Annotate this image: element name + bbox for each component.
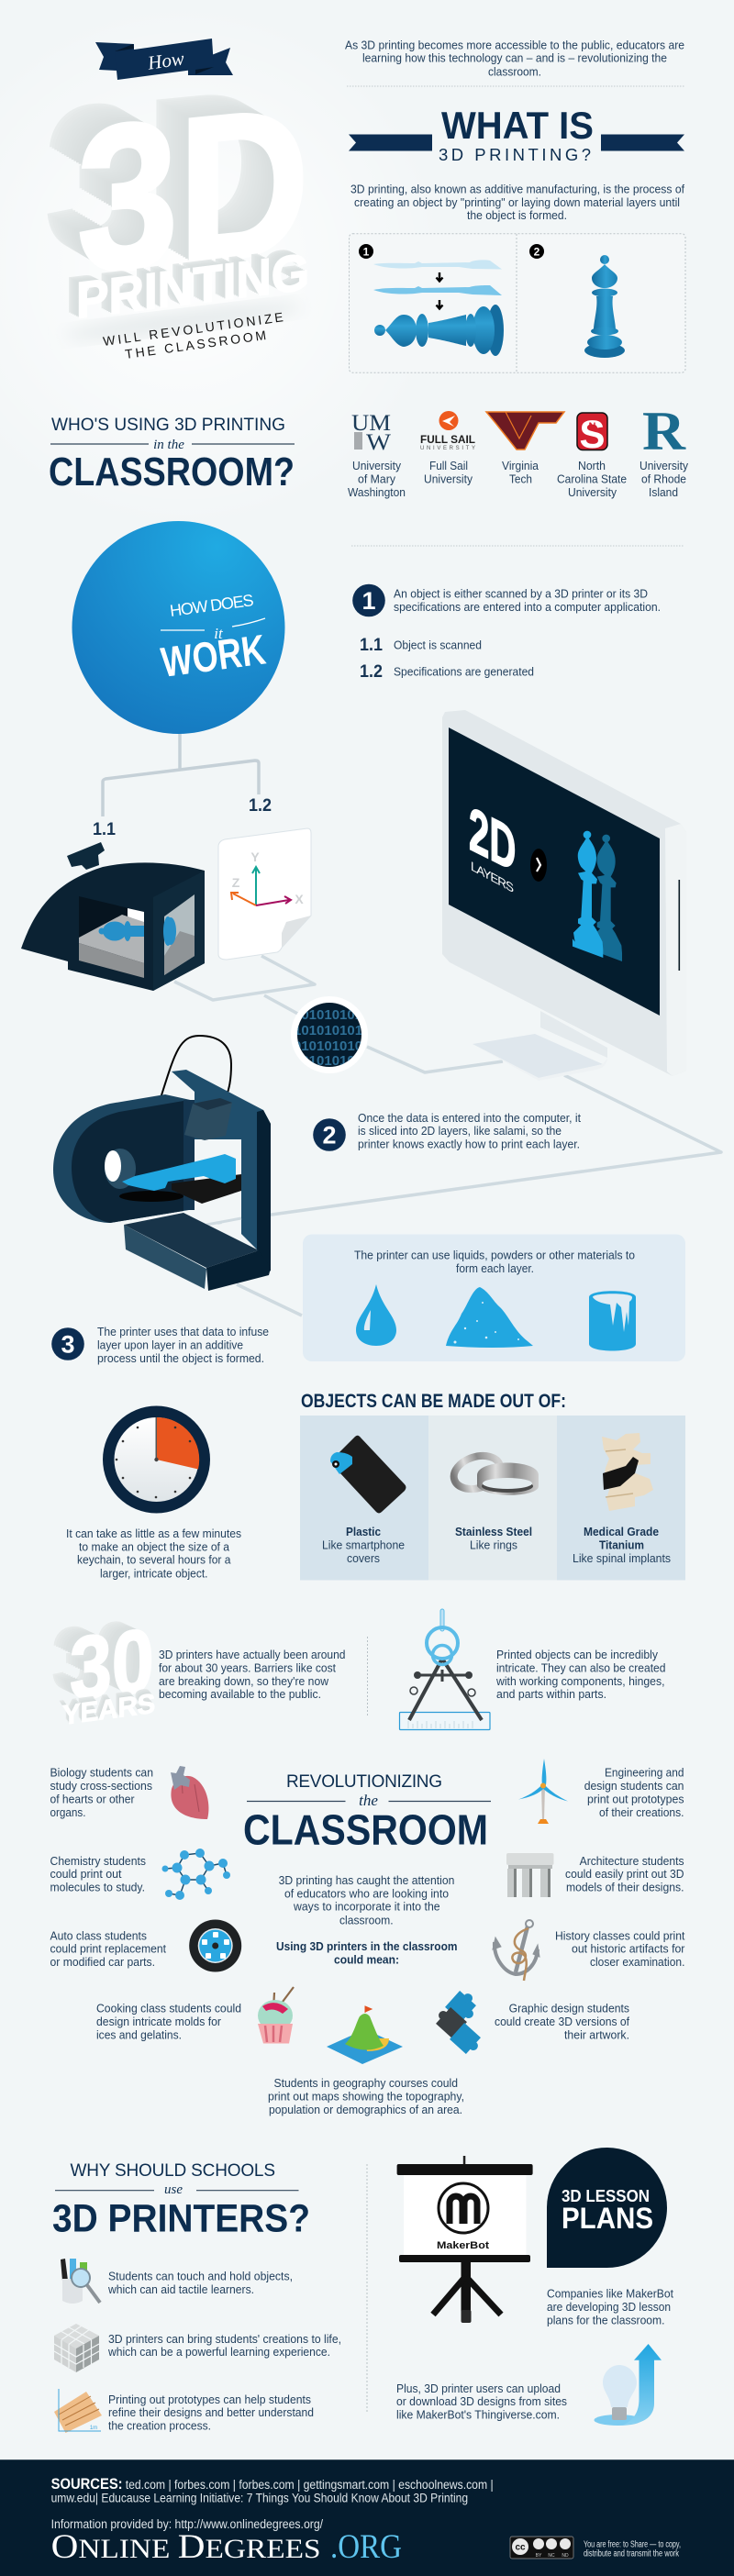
university labels: University	[424, 473, 473, 486]
icon: cube	[54, 2324, 99, 2372]
heading: who's using	[49, 416, 295, 494]
chess piece vertical	[584, 255, 625, 358]
icon: cup and magnifier	[61, 2259, 100, 2304]
step 2 text	[358, 1112, 581, 1150]
callout: graphic design: Graphic design students	[509, 2002, 629, 2015]
step 2 text: Once the data is entered into the computer, it	[358, 1112, 581, 1125]
heading: revolutionizing the classroom: CLASSROOM	[243, 1805, 488, 1853]
reason 2 text	[107, 2333, 341, 2359]
icon: scanner	[21, 842, 205, 991]
panel: titanium: Titanium	[599, 1539, 644, 1552]
icon: anchor	[493, 1920, 539, 1981]
badge 1: 1	[361, 587, 376, 615]
callout: engineering	[584, 1767, 684, 1819]
creative commons badge: BY	[536, 2553, 542, 2559]
panel: titanium: Like spinal implants	[573, 1552, 671, 1565]
center text: Using 3D printers in the classroom	[276, 1940, 457, 1953]
sources: ted.com | forbes.com | forbes.com | gettingsmart.com | eschoolnews.com |	[126, 2478, 494, 2492]
logo: Full Sail	[420, 411, 475, 451]
badge: 3D lesson plans	[547, 2148, 667, 2268]
chess piece horizontal	[374, 305, 504, 356]
callout: geography: population or demographics of an area.	[269, 2104, 462, 2116]
callout: geography: Students in geography courses could	[273, 2077, 458, 2090]
callout: auto class: or modified car parts.	[50, 1956, 155, 1969]
icon: tire	[189, 1919, 241, 1972]
binary circle: 1010101010	[294, 1053, 370, 1069]
panel: plastic: covers	[347, 1552, 380, 1565]
substep 1.1: Object is scanned	[394, 638, 482, 651]
sources: Information provided by: http://www.onlinedegrees.org/	[51, 2517, 323, 2531]
logo: Virginia Tech	[486, 412, 564, 450]
substep 1.2: 1.2	[360, 662, 383, 682]
binary circle: 1010101010	[294, 1023, 370, 1038]
reason 1 text: Students can touch and hold objects,	[108, 2270, 293, 2282]
callout: architecture	[565, 1855, 684, 1893]
heading: why should schools use 3D printers	[52, 2161, 310, 2241]
fact: intricate objects text: with working components, hinges,	[495, 1675, 664, 1688]
center text: ways to incorporate it into the	[293, 1901, 440, 1914]
fact: intricate objects text: Printed objects can be incredibly	[496, 1649, 659, 1661]
callout: history: out historic artifacts for	[572, 1943, 684, 1956]
callout: geography	[268, 2077, 464, 2116]
icon: 3D printer	[53, 1036, 271, 1291]
ribbon: How: How	[146, 47, 185, 74]
2D layers label: 2D	[469, 794, 516, 886]
clock caption: to make an object the size of a	[79, 1541, 229, 1554]
printer disc	[53, 1094, 195, 1223]
word years: YEARS	[62, 1689, 155, 1731]
icon: monitor	[442, 710, 686, 1081]
callout: chemistry: molecules to study.	[50, 1881, 145, 1893]
callout: chemistry: could print out	[50, 1868, 122, 1881]
logo: NC State: S	[580, 413, 606, 457]
callout: graphic design: could create 3D versions of	[495, 2015, 629, 2028]
callout: chemistry: Chemistry students	[50, 1855, 146, 1868]
license text	[584, 2540, 681, 2559]
center text: classroom.	[339, 1914, 394, 1926]
thingiverse text: like MakerBot's Thingiverse.com.	[396, 2409, 560, 2422]
university labels: Island	[649, 486, 678, 499]
intro text: learning how this technology can – and is – revolutionizing the	[362, 51, 667, 64]
brand logo: ONLINE DEGREES	[51, 2528, 321, 2566]
callout: architecture: Architecture students	[580, 1855, 684, 1868]
icon: spec sheet with axes: Y	[250, 849, 260, 864]
printer base	[124, 1225, 206, 1289]
callout: auto class: Auto class students	[50, 1930, 147, 1943]
callout: architecture: could easily print out 3D	[565, 1868, 684, 1881]
number 30: 30	[70, 1609, 154, 1719]
heading: why should schools use 3D printers: WHY SHOULD SCHOOLS	[70, 2161, 275, 2181]
sources: SOURCES:	[51, 2475, 123, 2493]
title word: 3D: 3D	[77, 63, 309, 316]
center text: could mean:	[334, 1954, 399, 1967]
icon: drop	[356, 1284, 396, 1346]
substep 1.2: Specifications are generated	[394, 666, 534, 679]
icon: rings	[450, 1450, 539, 1495]
icon: spec sheet with axes: Z	[232, 875, 240, 890]
creative commons badge: NC	[548, 2553, 555, 2559]
logo: NC State: N	[589, 421, 596, 432]
university labels: of Rhode	[641, 473, 686, 486]
makerbot logo	[437, 2183, 489, 2251]
logo: University of Mary Washington: UM	[351, 411, 391, 436]
panel: layering steps	[349, 234, 685, 372]
title subtitle: WILL REVOLUTIONIZE	[102, 309, 284, 349]
icon: topographic map	[327, 2006, 403, 2064]
step 3 text: layer upon layer in an additive	[97, 1339, 243, 1352]
panel: titanium: Medical Grade	[584, 1526, 659, 1538]
logo: Full Sail: FULL SAIL	[420, 435, 475, 446]
heading: revolutionizing the classroom: REVOLUTIONIZING	[286, 1772, 442, 1792]
heading: what is 3D printing	[349, 104, 684, 164]
panel: plastic: Plastic	[346, 1526, 381, 1538]
bishop front layer	[573, 831, 603, 958]
reason 1 text	[107, 2270, 293, 2296]
fact: 30 years text: becoming available to the public.	[159, 1688, 321, 1701]
callout: biology: Biology students can	[50, 1767, 153, 1780]
title word: Printing: PRINTING	[76, 242, 309, 329]
lesson plan text: plans for the classroom.	[547, 2314, 664, 2326]
step 3	[51, 1326, 269, 1365]
heading: why should schools use 3D printers: 3D PRINTERS?	[52, 2197, 310, 2241]
arrow down 2	[437, 300, 442, 308]
intro text	[345, 39, 684, 79]
printer tower	[172, 1070, 271, 1277]
circle: how does it work	[72, 521, 284, 734]
step 1 text	[394, 587, 661, 614]
center text	[276, 1874, 457, 1967]
reason 2 text: 3D printers can bring students' creations to life,	[108, 2333, 341, 2346]
fact: 30 years text: for about 30 years. Barriers like cost	[159, 1662, 336, 1675]
icon: phone case	[330, 1436, 406, 1514]
step 3 text	[97, 1326, 269, 1365]
reason 2 text: which can be a powerful learning experience.	[107, 2346, 330, 2359]
panel: plastic: Like smartphone	[322, 1539, 405, 1552]
step 1	[352, 584, 661, 682]
panel: materials	[303, 1235, 685, 1361]
heading: objects can be made out of: OBJECTS CAN BE MADE OUT OF:	[301, 1391, 566, 1412]
icon: projector screen	[397, 2156, 533, 2323]
badge 2	[313, 1118, 346, 1151]
callout: graphic design: their artwork.	[564, 2029, 629, 2042]
logos: universities	[351, 401, 686, 461]
callout: engineering: print out prototypes	[587, 1793, 684, 1805]
reason 3 text: the creation process.	[108, 2420, 211, 2433]
definition text	[350, 183, 684, 222]
printed object	[122, 1154, 236, 1191]
reason 1 text: which can aid tactile learners.	[107, 2283, 254, 2296]
fact: intricate objects text: intricate. They can also be created	[496, 1662, 666, 1675]
icon: columns	[506, 1853, 554, 1897]
step 3 text: The printer uses that data to infuse	[97, 1326, 269, 1338]
heading: revolutionizing the classroom	[243, 1772, 491, 1853]
monitor stand	[473, 1011, 607, 1081]
icon: compass and ruler	[400, 1609, 490, 1730]
footer	[0, 2459, 734, 2576]
icon: cupcake	[258, 1987, 294, 2044]
step 2	[313, 1112, 581, 1151]
center text: of educators who are looking into	[284, 1888, 449, 1901]
thingiverse text: Plus, 3D printer users can upload	[396, 2382, 561, 2395]
license text: You are free: to Share — to copy,	[584, 2540, 681, 2550]
clock caption: It can take as little as a few minutes	[66, 1527, 241, 1540]
step badge 2	[529, 244, 544, 259]
step 1 text: specifications are entered into a computer application.	[394, 601, 661, 614]
icon: spec sheet with axes: X	[295, 892, 304, 906]
callout: history: closer examination.	[590, 1956, 684, 1969]
definition text: 3D printing, also known as additive manufacturing, is the process of	[350, 183, 684, 196]
callout: cooking	[96, 2002, 241, 2042]
callout: engineering: Engineering and	[605, 1767, 684, 1780]
university labels: Carolina State	[557, 473, 627, 486]
badge 1	[352, 584, 385, 616]
creative commons badge	[510, 2537, 573, 2559]
icon: wind turbine	[518, 1759, 568, 1824]
panel: stainless steel: Stainless Steel	[455, 1526, 532, 1538]
university labels: of Mary	[358, 473, 396, 486]
heading: who's using: in the	[153, 438, 184, 452]
badge 2: 2	[322, 1121, 337, 1149]
step 2 text: is sliced into 2D layers, like salami, so the	[358, 1125, 562, 1138]
callout: cooking: ices and gelatins.	[96, 2029, 182, 2042]
callout: auto class	[50, 1930, 166, 1969]
panel: titanium	[557, 1416, 685, 1580]
sources: umw.edu| Educause Learning Initiative: 7 Things You Should Know About 3D Printing	[51, 2492, 468, 2505]
icon: clock	[103, 1405, 210, 1514]
callout: engineering: design students can	[584, 1780, 684, 1793]
lesson plan text: Companies like MakerBot	[547, 2288, 673, 2301]
print bed	[119, 1191, 184, 1202]
icon: spec sheet with axes	[218, 828, 311, 960]
title: 3D Printing will revolutionize the classroom	[48, 63, 309, 361]
makerbot logo: MakerBot	[437, 2240, 489, 2251]
binary circle: 0101010100	[294, 1038, 370, 1054]
icon: wood plank: 1m	[90, 2426, 97, 2431]
university labels: University	[352, 460, 402, 472]
icon: powder pile	[446, 1287, 533, 1348]
callout: biology: study cross-sections	[50, 1780, 152, 1793]
badge 3	[51, 1327, 84, 1360]
university labels: North	[578, 460, 606, 472]
fact: 30 years text	[159, 1649, 345, 1701]
first layer	[373, 260, 502, 270]
label 1.2: 1.2	[249, 796, 272, 816]
binary circle: 1010101010	[294, 1007, 370, 1023]
university labels: Tech	[509, 473, 532, 486]
lesson plan text	[547, 2288, 673, 2326]
badge 3: 3	[61, 1330, 75, 1358]
university labels: Washington	[348, 486, 406, 499]
callout: biology: organs.	[50, 1806, 86, 1819]
label 1.1: 1.1	[93, 820, 116, 839]
intro text: As 3D printing becomes more accessible to the public, educators are	[345, 39, 684, 51]
bishop back layer	[592, 835, 622, 961]
bishop inside scanner	[99, 916, 176, 946]
filament wire	[161, 1036, 231, 1099]
callout: history: History classes could print	[555, 1930, 685, 1943]
substep 1.1	[360, 636, 482, 655]
reason 3 text: Printing out prototypes can help students	[108, 2393, 311, 2406]
panel: plastic	[300, 1416, 428, 1580]
icon: spine	[602, 1433, 653, 1511]
callout: biology	[50, 1767, 153, 1819]
step badge 2: 2	[534, 246, 540, 259]
step badge 1	[359, 244, 373, 259]
callout: architecture: models of their designs.	[566, 1881, 684, 1893]
circle: how does it work: it	[214, 625, 224, 642]
panel: stainless steel	[428, 1416, 557, 1580]
connector lines	[103, 732, 721, 1316]
icon: liquid bucket	[589, 1291, 636, 1350]
brand logo: .ORG	[330, 2528, 402, 2566]
step badge 1: 1	[363, 246, 370, 259]
icon: light bulb and arrow	[595, 2344, 662, 2426]
thingiverse text	[396, 2382, 567, 2422]
fact: 30 years text: are breaking down, so they're now	[159, 1675, 329, 1688]
clock caption: keychain, to several hours for a	[77, 1554, 231, 1567]
arrow down 1	[437, 272, 442, 281]
second layer	[373, 285, 502, 295]
substep 1.2	[360, 662, 534, 682]
callout: chemistry	[50, 1855, 146, 1893]
circle: how does it work: HOW DOES	[169, 591, 255, 620]
ribbon: How	[95, 39, 233, 80]
heading: why should schools use 3D printers: use	[164, 2182, 183, 2197]
fact: 30 years text: 3D printers have actually been around	[159, 1649, 345, 1661]
heading: revolutionizing the classroom: the	[359, 1792, 378, 1809]
title subtitle: THE CLASSROOM	[124, 328, 267, 361]
binary circle	[291, 996, 370, 1073]
creative commons badge: cc	[515, 2543, 526, 2552]
step 1 text: An object is either scanned by a 3D printer or its 3D	[394, 587, 648, 600]
logo: University of Mary Washington: W	[366, 430, 391, 455]
arrow chevron	[530, 849, 547, 882]
university labels: Virginia	[502, 460, 539, 472]
logo: Full Sail: UNIVERSITY	[420, 446, 475, 451]
callout: geography: print out maps showing the topography,	[268, 2090, 464, 2103]
university labels	[348, 460, 689, 499]
definition text: the object is formed.	[467, 209, 567, 222]
icon: molecule	[161, 1849, 230, 1900]
panel: stainless steel: Like rings	[470, 1539, 517, 1552]
logo: University of Mary Washington	[351, 411, 391, 455]
panel: materials: The printer can use liquids, powders or other materials to	[354, 1249, 635, 1262]
badge: 3D lesson plans: PLANS	[562, 2202, 653, 2235]
callout: graphic design	[495, 2002, 629, 2042]
2D layers label: LAYERS	[471, 860, 514, 896]
clock caption	[66, 1527, 241, 1580]
definition text: creating an object by "printing" or laying down material layers until	[354, 196, 680, 209]
heading: what is 3D printing: WHAT IS	[441, 104, 594, 147]
icon: puzzle pieces	[432, 1987, 484, 2057]
university labels: Full Sail	[429, 460, 468, 472]
fact: intricate objects text: and parts within parts.	[496, 1688, 606, 1701]
icon: heart	[171, 1766, 208, 1819]
university labels: University	[639, 460, 689, 472]
callout: biology: of hearts or other	[50, 1793, 134, 1805]
callout: cooking: design intricate molds for	[96, 2015, 221, 2028]
sources	[51, 2475, 494, 2531]
callout: cooking: Cooking class students could	[96, 2002, 241, 2015]
callout: auto class: could print replacement	[50, 1943, 166, 1956]
heading: who's using: WHO'S USING 3D PRINTING	[51, 416, 285, 435]
thingiverse text: or download 3D designs from sites	[396, 2395, 567, 2408]
clock caption: larger, intricate object.	[100, 1567, 207, 1580]
panel: materials: form each layer.	[456, 1262, 534, 1275]
intro text: classroom.	[488, 66, 541, 79]
step 2 text: printer knows exactly how to print each layer.	[358, 1138, 580, 1150]
heading: who's using: CLASSROOM?	[49, 450, 295, 494]
logo: Rhode Island: R	[642, 401, 686, 461]
fact: intricate objects text	[495, 1649, 666, 1701]
step 3 text: process until the object is formed.	[97, 1352, 264, 1365]
license text: distribute and transmit the work	[584, 2549, 680, 2559]
30 years graphic	[53, 1609, 155, 1731]
print head	[184, 1098, 232, 1140]
icon: wood plank	[54, 2389, 102, 2433]
callout: engineering: of their creations.	[599, 1806, 684, 1819]
creative commons badge: ND	[562, 2553, 569, 2559]
reason 3 text: refine their designs and better understand	[108, 2406, 314, 2419]
circle: how does it work: WORK	[159, 625, 268, 686]
reason 3 text	[108, 2393, 314, 2433]
substep 1.1: 1.1	[360, 636, 383, 655]
lesson plan text: are developing 3D lesson	[547, 2301, 671, 2314]
badge: 3D lesson plans: 3D LESSON	[562, 2187, 650, 2205]
heading: what is 3D printing: 3D PRINTING?	[439, 145, 591, 164]
university labels: University	[568, 486, 617, 499]
center text: 3D printing has caught the attention	[279, 1874, 454, 1887]
callout: history	[555, 1930, 685, 1969]
